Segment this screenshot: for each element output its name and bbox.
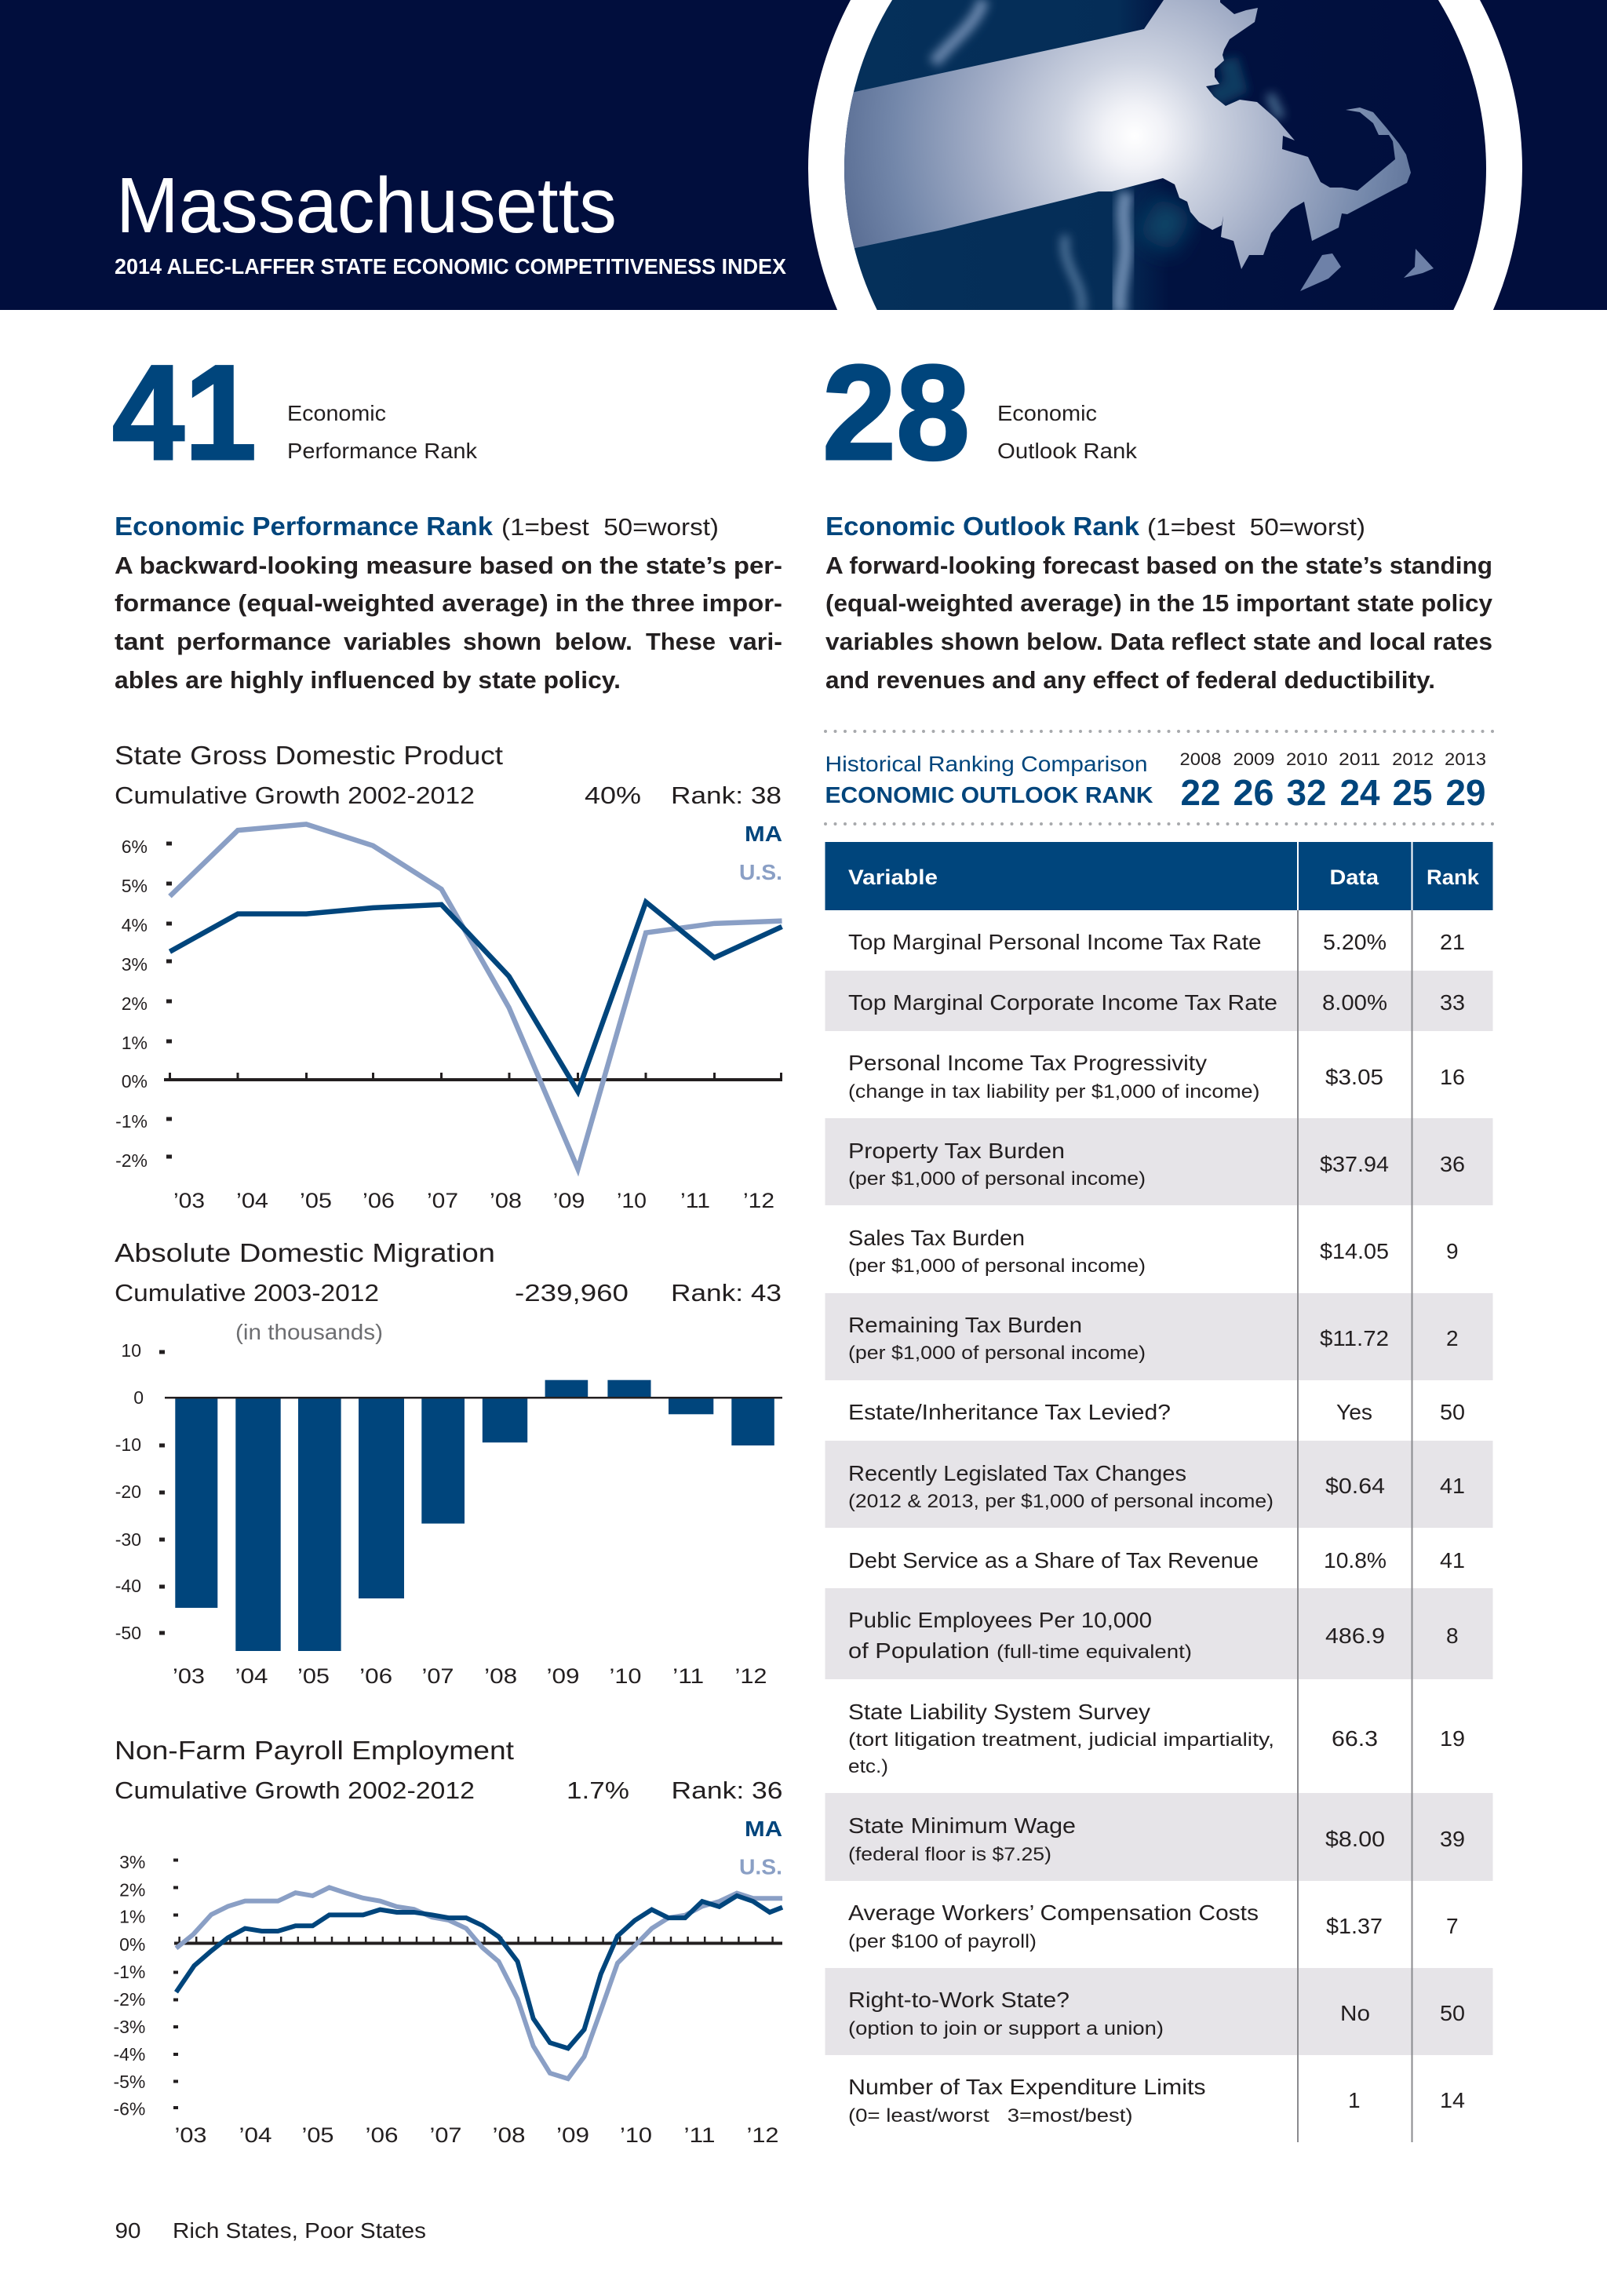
chart heading: Rank: 38 <box>671 782 782 809</box>
y axis labels <box>115 836 148 1171</box>
y axis labels: 0 <box>133 1387 144 1408</box>
y axis labels: -1% <box>113 1962 145 1982</box>
description: A backward-looking measure based on the state’s per- <box>115 552 782 579</box>
row: average workers compensation costs: (per $100 of payroll) <box>848 1931 1037 1952</box>
row: estate inheritance tax levied: Estate/Inheritance Tax Levied? <box>848 1400 1171 1424</box>
x axis labels: ’07 <box>427 1189 458 1212</box>
row: remaining tax burden: $11.72 <box>1320 1326 1389 1350</box>
heading: Economic Outlook Rank <box>825 512 1140 541</box>
row: state minimum wage <box>848 1813 1465 1865</box>
x axis labels: ’11 <box>672 1664 704 1688</box>
chart heading <box>115 741 782 809</box>
row: state liability system survey: 19 <box>1440 1726 1465 1751</box>
row: estate inheritance tax levied: 50 <box>1440 1400 1465 1424</box>
row: top marginal corporate income tax rate <box>848 990 1465 1015</box>
comparison heading: Historical Ranking Comparison <box>825 752 1147 776</box>
row: property tax burden: 36 <box>1440 1152 1465 1176</box>
big number 28: 28 <box>822 337 970 488</box>
line: U.S. <box>176 1887 782 2079</box>
row: estate inheritance tax levied <box>848 1400 1465 1424</box>
line: U.S. <box>169 824 782 1169</box>
footer: Rich States, Poor States <box>173 2218 426 2243</box>
chart heading: Cumulative Growth 2002-2012 <box>115 1777 475 1804</box>
row: sales tax burden: Sales Tax Burden <box>848 1226 1025 1250</box>
year labels: 2013 <box>1445 749 1486 769</box>
row: top marginal personal income tax rate: 21 <box>1440 930 1465 954</box>
y axis labels: 3% <box>122 954 148 975</box>
year labels <box>1180 749 1486 769</box>
y axis labels: 1% <box>122 1033 148 1053</box>
row: public employees per 10,000 of population: 8 <box>1446 1624 1459 1648</box>
row: right-to-work state: (option to join or support a union) <box>848 2018 1164 2039</box>
table header: Variable <box>848 866 938 889</box>
row: personal income tax progressivity: 16 <box>1440 1065 1465 1089</box>
legend: MA <box>745 1817 782 1841</box>
row: property tax burden <box>848 1139 1465 1190</box>
chart heading: Rank: 43 <box>671 1279 782 1307</box>
x axis labels: ’09 <box>546 1664 579 1688</box>
x axis labels: ’06 <box>359 1664 392 1688</box>
row: remaining tax burden: 2 <box>1446 1326 1459 1350</box>
big number 41: 41 <box>112 337 257 488</box>
yearly rank values: 26 <box>1233 772 1274 813</box>
row: debt service share of tax revenue <box>848 1548 1465 1573</box>
row: number of tax expenditure limits: Number of Tax Expenditure Limits <box>848 2075 1206 2099</box>
heading: (1=best 50=worst) <box>501 513 719 541</box>
description: variables <box>344 628 451 655</box>
row: average workers compensation costs: $1.37 <box>1326 1914 1383 1938</box>
panel: chart state gross domestic product <box>115 741 782 1212</box>
x axis labels: ’07 <box>422 1664 454 1688</box>
chart heading: State Gross Domestic Product <box>115 741 503 770</box>
x axis labels: ’03 <box>174 2123 207 2147</box>
legend: U.S. <box>739 860 782 884</box>
x axis labels: ’10 <box>620 2123 652 2147</box>
y axis labels: 10 <box>121 1340 141 1361</box>
row: remaining tax burden <box>848 1313 1459 1364</box>
x axis labels: ’03 <box>173 1189 205 1212</box>
description: performance <box>177 628 331 655</box>
row: estate inheritance tax levied: Yes <box>1336 1400 1372 1424</box>
row: remaining tax burden: Remaining Tax Burden <box>848 1313 1082 1337</box>
y axis labels: 5% <box>122 876 148 896</box>
x axis labels: ’10 <box>609 1664 642 1688</box>
row: personal income tax progressivity: Personal Income Tax Progressivity <box>848 1051 1207 1075</box>
x axis labels: ’06 <box>363 1189 395 1212</box>
x axis labels: ’09 <box>552 1189 585 1212</box>
heading: Economic Performance Rank <box>115 512 494 541</box>
description: formance (equal-weighted average) in the three impor- <box>115 589 782 617</box>
y axis labels: -2% <box>113 1989 145 2010</box>
legend: MA <box>745 822 782 846</box>
description: variables shown below. Data reflect state and local rates <box>825 628 1492 655</box>
y axis labels <box>115 1340 144 1643</box>
description <box>825 552 1493 694</box>
year labels: 2010 <box>1286 749 1328 769</box>
icon: Massachusetts map in circle <box>808 0 1522 310</box>
row: sales tax burden <box>848 1226 1459 1277</box>
bar chart <box>175 1380 774 1651</box>
rank label: Economic <box>287 401 386 425</box>
y axis labels: 4% <box>122 915 148 935</box>
line: MA <box>169 902 782 1092</box>
row: public employees per 10,000 of population: 486.9 <box>1325 1624 1385 1648</box>
x axis labels: ’08 <box>493 2123 526 2147</box>
row: state minimum wage: State Minimum Wage <box>848 1813 1076 1838</box>
y axis labels: -50 <box>115 1623 141 1643</box>
row: personal income tax progressivity <box>848 1051 1465 1102</box>
y axis labels: -2% <box>115 1150 148 1171</box>
x axis labels: ’05 <box>300 1189 332 1212</box>
row: state minimum wage: 39 <box>1440 1827 1465 1851</box>
comparison heading <box>825 752 1153 808</box>
panel: chart absolute domestic migration <box>115 1238 782 1688</box>
row: public employees per 10,000 of population: (full-time equivalent) <box>997 1642 1192 1663</box>
description: vari- <box>729 628 782 655</box>
row: average workers compensation costs: 7 <box>1446 1914 1459 1938</box>
chart heading: -239,960 <box>515 1279 629 1307</box>
panel: economic performance rank summary <box>112 337 782 694</box>
row: state liability system survey: 66.3 <box>1332 1726 1378 1751</box>
y axis labels: -10 <box>115 1434 141 1455</box>
x axis labels: ’09 <box>556 2123 589 2147</box>
comparison heading: ECONOMIC OUTLOOK RANK <box>825 783 1153 808</box>
y axis labels: 2% <box>119 1880 145 1901</box>
y axis labels: 0% <box>119 1934 145 1955</box>
row: state liability system survey: State Liability System Survey <box>848 1700 1150 1724</box>
unit note: (in thousands) <box>235 1320 383 1344</box>
x axis labels: ’05 <box>301 2123 334 2147</box>
rank label <box>287 401 478 463</box>
description: ables are highly influenced by state policy. <box>115 666 621 694</box>
row: number of tax expenditure limits: 1 <box>1348 2088 1361 2112</box>
table header <box>825 842 1492 910</box>
row: public employees per 10,000 of population <box>848 1608 1459 1663</box>
y axis labels <box>113 1852 145 2119</box>
chart heading <box>115 1736 783 1804</box>
description: (equal-weighted average) in the 15 important state policy <box>825 589 1493 617</box>
x axis labels <box>174 2123 778 2147</box>
row: average workers compensation costs <box>848 1901 1459 1952</box>
row: state liability system survey: (tort litigation treatment, judicial impartiality, <box>848 1729 1274 1751</box>
y axis labels: -6% <box>113 2099 145 2119</box>
year labels: 2011 <box>1339 749 1380 769</box>
y axis labels: 0% <box>122 1071 148 1092</box>
table header: Data <box>1329 866 1379 889</box>
row: property tax burden: (per $1,000 of personal income) <box>848 1168 1146 1190</box>
row: top marginal personal income tax rate <box>848 930 1465 954</box>
rank label <box>997 401 1138 463</box>
y axis labels: 6% <box>122 836 148 857</box>
chart heading: Cumulative 2003-2012 <box>115 1279 379 1307</box>
row: recently legislated tax changes: 41 <box>1440 1474 1465 1498</box>
axis <box>164 1073 782 1081</box>
chart heading: Non-Farm Payroll Employment <box>115 1736 514 1765</box>
row: right-to-work state: Right-to-Work State? <box>848 1988 1070 2012</box>
x axis labels: ’12 <box>734 1664 767 1688</box>
y axis labels: -5% <box>113 2072 145 2092</box>
year labels: 2009 <box>1233 749 1274 769</box>
x axis labels <box>173 1189 774 1212</box>
row: state minimum wage: (federal floor is $7.25) <box>848 1844 1051 1865</box>
chart heading: 1.7% <box>567 1777 629 1804</box>
row: state minimum wage: $8.00 <box>1325 1827 1385 1851</box>
yearly rank values <box>1180 772 1486 813</box>
axis <box>174 1937 782 1944</box>
yearly rank values: 22 <box>1180 772 1221 813</box>
year labels: 2012 <box>1392 749 1434 769</box>
chart heading <box>115 1238 782 1307</box>
row: remaining tax burden: (per $1,000 of personal income) <box>848 1343 1146 1364</box>
description <box>115 552 782 694</box>
row: debt service share of tax revenue: 41 <box>1440 1548 1465 1573</box>
chart heading: Absolute Domestic Migration <box>115 1238 495 1267</box>
chart heading: 40% <box>585 782 641 809</box>
row: top marginal corporate income tax rate: Top Marginal Corporate Income Tax Rate <box>848 990 1277 1015</box>
row: right-to-work state: No <box>1340 2001 1370 2025</box>
y axis labels: -20 <box>115 1481 141 1502</box>
y axis labels: 2% <box>122 993 148 1014</box>
description: shown <box>463 628 541 655</box>
row: sales tax burden: 9 <box>1446 1239 1459 1263</box>
yearly rank values: 32 <box>1287 772 1326 813</box>
row: recently legislated tax changes: Recently Legislated Tax Changes <box>848 1461 1186 1485</box>
line: MA <box>176 1896 782 2048</box>
yearly rank values: 29 <box>1445 772 1486 813</box>
description: tant <box>115 628 164 655</box>
row: personal income tax progressivity: $3.05 <box>1325 1065 1383 1089</box>
year labels: 2008 <box>1180 749 1221 769</box>
table header: Rank <box>1427 866 1480 889</box>
x axis labels: ’08 <box>484 1664 517 1688</box>
heading: (1=best 50=worst) <box>1147 513 1365 541</box>
row: recently legislated tax changes <box>848 1461 1465 1512</box>
row: personal income tax progressivity: (change in tax liability per $1,000 of income) <box>848 1081 1260 1102</box>
chart heading: Cumulative Growth 2002-2012 <box>115 782 475 809</box>
footer: 90 <box>115 2218 141 2243</box>
row: number of tax expenditure limits: 14 <box>1440 2088 1465 2112</box>
yearly rank values: 24 <box>1340 772 1380 813</box>
x axis labels: ’08 <box>490 1189 522 1212</box>
x axis labels: ’07 <box>430 2123 461 2147</box>
rank label: Performance Rank <box>287 439 478 463</box>
row: average workers compensation costs: Average Workers’ Compensation Costs <box>848 1901 1259 1925</box>
legend: U.S. <box>739 1855 782 1879</box>
yearly rank values: 25 <box>1392 772 1433 813</box>
y axis labels: -3% <box>113 2017 145 2037</box>
x axis labels: ’12 <box>747 2123 778 2147</box>
x axis labels: ’11 <box>680 1189 710 1212</box>
chart heading: Rank: 36 <box>672 1777 783 1804</box>
description: and revenues and any effect of federal deductibility. <box>825 666 1435 694</box>
x axis labels: ’11 <box>684 2123 716 2147</box>
row: top marginal corporate income tax rate: 8.00% <box>1322 990 1387 1015</box>
subtitle: 2014 ALEC-LAFFER STATE ECONOMIC COMPETITIVENESS INDEX <box>115 254 786 279</box>
x axis labels: ’12 <box>743 1189 774 1212</box>
row: public employees per 10,000 of population: of Population <box>848 1638 989 1663</box>
row: debt service share of tax revenue: Debt Service as a Share of Tax Revenue <box>848 1548 1259 1573</box>
row: right-to-work state: 50 <box>1440 2001 1465 2025</box>
description: These <box>646 628 716 655</box>
x axis labels: ’04 <box>239 2123 271 2147</box>
row: top marginal corporate income tax rate: 33 <box>1440 990 1465 1015</box>
row: top marginal personal income tax rate: Top Marginal Personal Income Tax Rate <box>848 930 1262 954</box>
row: sales tax burden: $14.05 <box>1320 1239 1389 1263</box>
rank label: Outlook Rank <box>997 439 1138 463</box>
x axis labels: ’05 <box>297 1664 330 1688</box>
rank label: Economic <box>997 401 1097 425</box>
y axis labels: -40 <box>115 1576 141 1596</box>
row: number of tax expenditure limits <box>848 2075 1465 2127</box>
row: property tax burden: $37.94 <box>1320 1152 1389 1176</box>
y axis labels: -30 <box>115 1529 141 1550</box>
x axis labels <box>173 1664 767 1688</box>
heading <box>115 512 719 541</box>
x axis labels: ’06 <box>366 2123 399 2147</box>
header banner <box>0 0 1607 310</box>
panel: economic outlook rank summary <box>822 337 1493 694</box>
y axis labels: 1% <box>119 1907 145 1927</box>
row: top marginal personal income tax rate: 5.20% <box>1323 930 1387 954</box>
panel: chart non-farm payroll employment <box>113 1736 782 2147</box>
row: sales tax burden: (per $1,000 of personal income) <box>848 1256 1146 1277</box>
y axis labels: -1% <box>115 1111 148 1132</box>
row: right-to-work state <box>848 1988 1465 2039</box>
y axis labels: 3% <box>119 1852 145 1872</box>
legend <box>739 1817 782 1879</box>
row: number of tax expenditure limits: (0= least/worst 3=most/best) <box>848 2105 1133 2127</box>
row: recently legislated tax changes: (2012 & 2013, per $1,000 of personal income) <box>848 1491 1274 1512</box>
row: state liability system survey: etc.) <box>848 1756 888 1777</box>
row: state liability system survey <box>848 1700 1465 1777</box>
x axis labels: ’10 <box>617 1189 647 1212</box>
heading <box>825 512 1365 541</box>
description: A forward-looking forecast based on the state’s standing <box>825 552 1492 579</box>
x axis labels: ’03 <box>173 1664 205 1688</box>
row: debt service share of tax revenue: 10.8% <box>1324 1548 1387 1573</box>
x axis labels: ’04 <box>235 1664 268 1688</box>
panel: policy variables table <box>825 842 1492 2142</box>
row: public employees per 10,000 of population: Public Employees Per 10,000 <box>848 1608 1152 1632</box>
y axis labels: -4% <box>113 2044 145 2065</box>
title: Massachusetts <box>116 162 617 250</box>
row: recently legislated tax changes: $0.64 <box>1325 1474 1385 1498</box>
x axis labels: ’04 <box>236 1189 268 1212</box>
panel: historical ranking comparison <box>825 731 1493 824</box>
legend <box>739 822 782 884</box>
description: below. <box>555 628 632 655</box>
row: property tax burden: Property Tax Burden <box>848 1139 1065 1163</box>
